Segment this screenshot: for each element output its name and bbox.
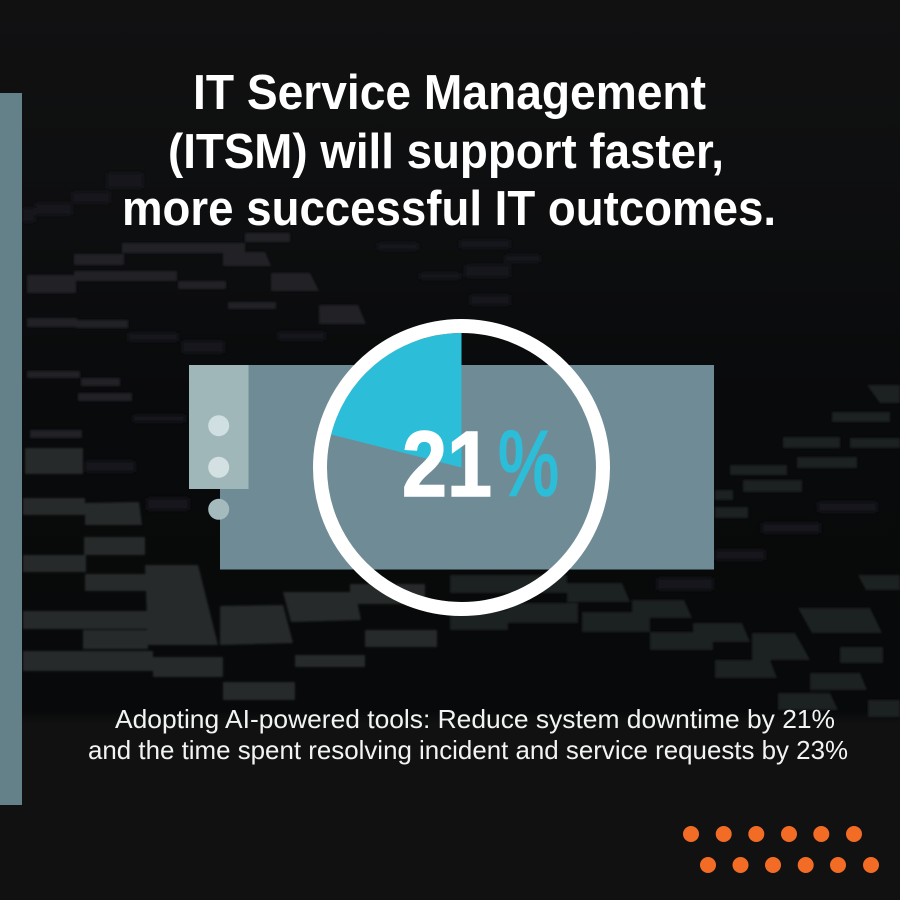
stat: 21%: 21 [402,412,492,516]
description text: and the time spent resolving incident and service requests by 23% [88,735,848,765]
background pattern: faint blocks [22,173,877,590]
title: more successful IT outcomes. [122,182,776,236]
pie wedge: 21% [331,333,462,468]
stat: 21% [402,412,559,516]
background pattern: upper-left blocks [27,233,366,438]
description text: Adopting AI-powered tools: Reduce system downtime by 21% [115,704,835,734]
description text [88,704,848,765]
orange dot decoration [683,826,879,873]
window sidebar tab [189,365,248,489]
ring [320,326,603,609]
left vertical bar [0,93,22,805]
background pattern: lower-left blocks [23,448,437,700]
title [122,66,776,236]
title: IT Service Management [193,66,706,120]
chart panel: background window [220,365,714,570]
background pattern: right blocks [450,385,900,717]
title: (ITSM) will support faster, [168,125,724,179]
stat: 21%: % [498,413,559,515]
window dots [208,415,229,520]
